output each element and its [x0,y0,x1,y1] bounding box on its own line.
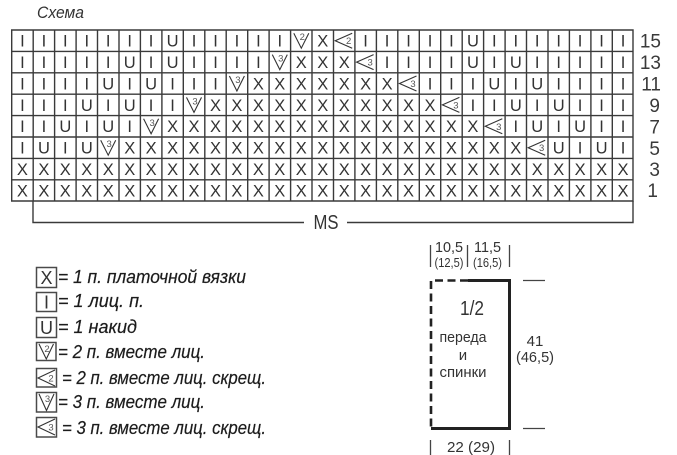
symbol: left 3 row 11 [400,76,416,91]
row numbers: 9 [649,96,660,117]
schematic outline [431,280,510,428]
legend item: X: = 1 п. платочной вязки [58,267,246,287]
symbol: V3 row 5 [101,139,116,155]
top dimensions: (16,5) [473,255,502,270]
symbol: left 3 row 9 [442,97,459,112]
legend item: left 2: = 2 п. вместе лиц. скрещ. [62,368,266,388]
symbol: V3 row 13 [272,54,287,70]
legend item: left 3: = 3 п. вместе лиц. скрещ. [62,418,266,438]
row 5 stitches: IUIUXXXXXXXXXXXXXXXXXXXUIUI [20,140,625,158]
legend item: left 3: 3 [48,422,54,434]
row numbers [640,32,661,202]
symbol: left 3 row 7: 3 [496,122,501,133]
row 13 stitches: IIIIIUIUIIIIXXXIIIIUIUIIIII [20,54,625,72]
row 9 stitches: IIIUIUIIXXXXXXXXXXXIIUIUIII [20,97,625,115]
symbol: left 3 row 5 [528,140,545,155]
symbol: V3 row 5: 3 [107,139,112,150]
symbol: left 2 row 15 [335,33,352,48]
legend item: left 2: 2 [48,374,54,384]
legend item: V2: 2 [44,344,50,355]
legend item: V3: = 3 п. вместе лиц. [58,392,205,412]
height dimension [516,333,554,366]
height dimension: 41 [527,333,543,350]
symbol: left 3 row 7 [485,119,502,134]
row numbers: 5 [649,139,660,160]
row 11 stitches: IIIIUIUIIIXXXXXXXIIIUIUIIII [20,75,625,93]
schematic: 1/2 front and back [430,239,554,455]
legend [36,267,266,438]
row numbers: 7 [649,118,660,138]
symbol: left 3 row 13 [357,55,374,70]
symbol: left 3 row 5: 3 [539,143,544,154]
panel label: и [459,347,467,364]
symbol: V3 row 9: 3 [192,96,198,107]
row 1 stitches: XXXXXXXXXXXXXXXXXXXXXXXXXXXXX [17,182,629,200]
row 15 stitches: IIIIIIIUIIIIIXIIIIIUIIIIIII [20,33,625,51]
symbol: left 3 row 13: 3 [367,58,373,69]
row 3 stitches: XXXXXXXXXXXXXXXXXXXXXXXXXXXXX [17,161,629,179]
symbol: left 3 row 11: 3 [410,79,416,90]
legend item: U: U [40,318,53,338]
row numbers: 13 [640,53,661,74]
top dimensions: 10,5 [435,239,463,256]
bracket: MS repeat: MS [314,212,338,234]
bracket: MS repeat [33,201,633,234]
row numbers: 15 [640,32,661,52]
legend item: V3: 3 [45,394,50,405]
panel label: 1/2 [460,298,484,320]
legend item: X: X [40,268,53,288]
symbol: V3 row 7: 3 [149,118,155,129]
row 7 stitches: IIUIUIXXXXXXXXXXXXXXXIUIUII [20,118,625,136]
height dimension: (46,5) [516,349,554,366]
right ticks [523,280,545,428]
row numbers: 11 [641,74,661,96]
legend item: V2: = 2 п. вместе лиц. [58,342,205,362]
symbol: V3 row 13: 3 [278,54,283,65]
panel label [440,298,487,381]
top ticks [430,245,510,267]
legend item: I: I [44,292,49,312]
bottom ticks [430,440,510,455]
legend item: U: = 1 накид [58,317,137,337]
row numbers: 3 [649,160,660,181]
chart: knitting pattern grid [12,30,633,201]
symbol: V3 row 11 [229,75,244,91]
symbol: V3 row 9 [186,96,202,112]
symbol: V2 row 15: 2 [300,32,305,43]
symbol: left 3 row 9: 3 [453,100,459,111]
panel label: спинки [440,364,486,381]
top dimensions: 11,5 [474,239,501,256]
symbol: V3 row 11: 3 [235,75,241,86]
top dimensions [434,239,502,270]
row numbers: 1 [647,181,658,202]
legend item: I: = 1 лиц. п. [58,291,144,311]
symbol: left 2 row 15: 2 [346,36,351,47]
panel label: переда [440,329,487,346]
title: Схема: Схема [37,3,84,22]
top dimensions: (12,5) [434,255,464,270]
symbol: V2 row 15 [294,32,309,48]
symbol: V3 row 7 [144,118,159,134]
